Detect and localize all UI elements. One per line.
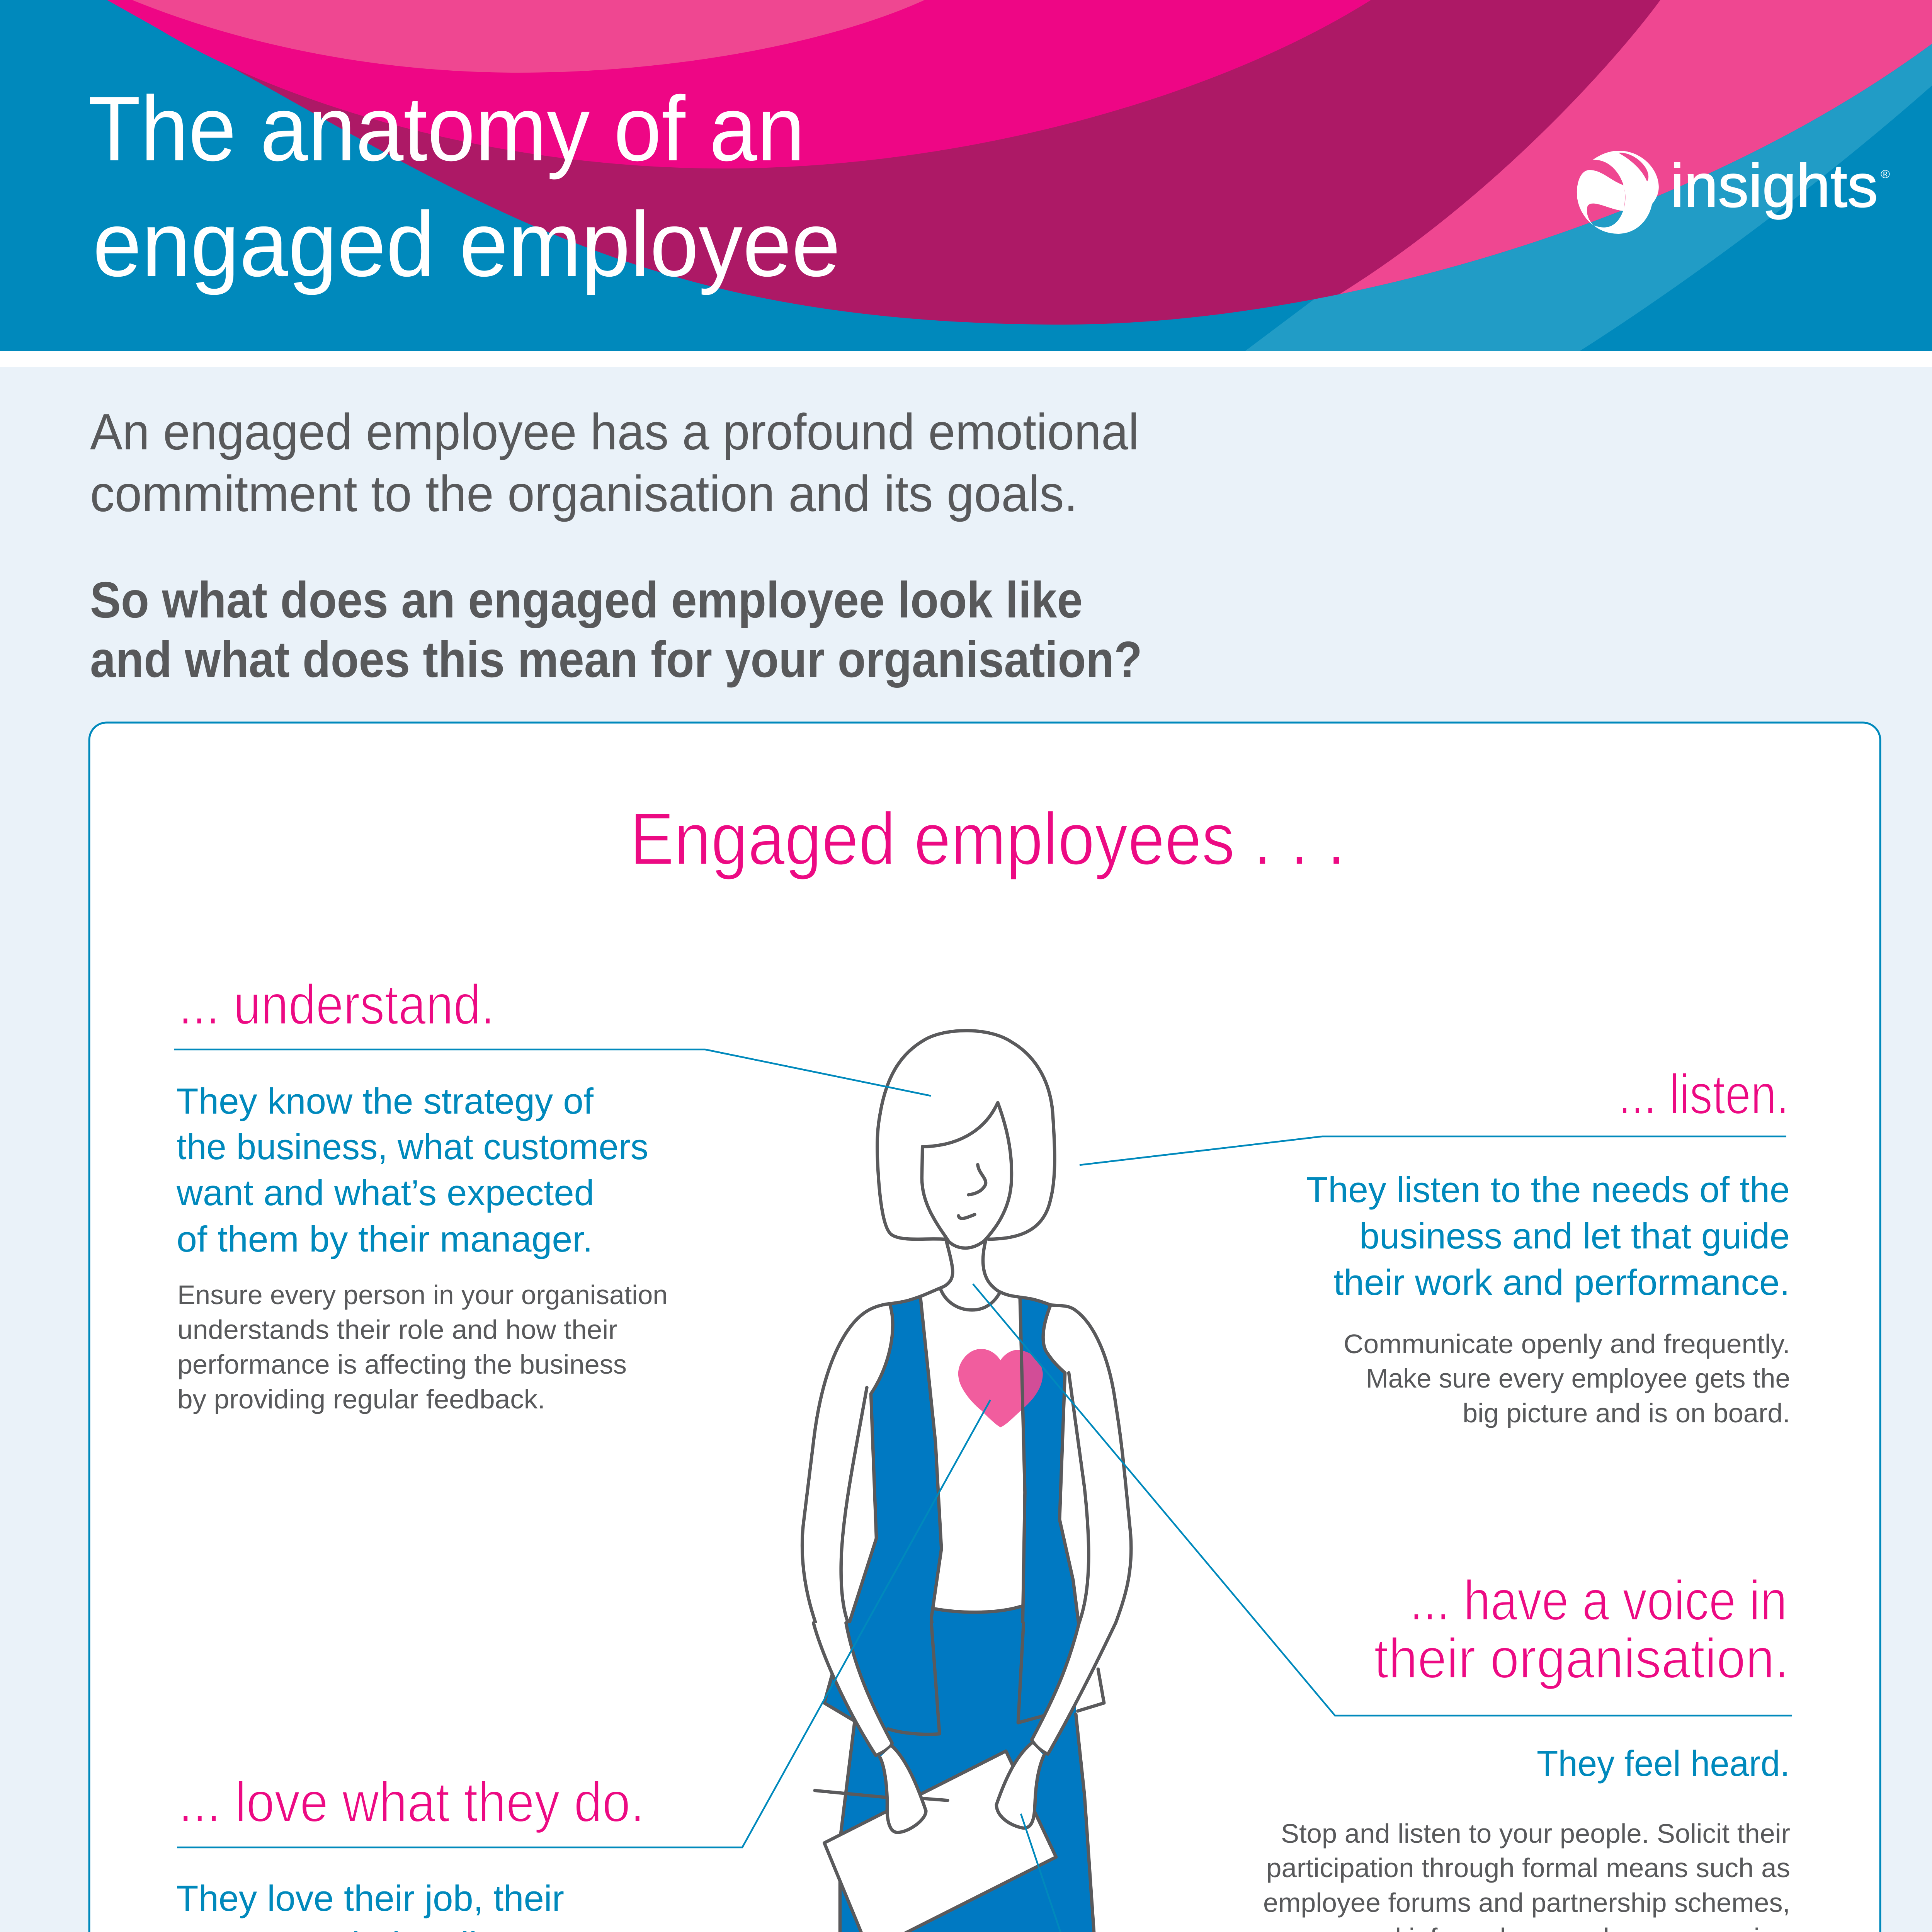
body text: voice: participation through formal means such as <box>1266 1853 1790 1883</box>
head and hair <box>877 1031 1054 1310</box>
intro statement: An engaged employee has a profound emotional <box>90 403 1139 460</box>
body text: voice: employee forums and partnership schemes, <box>1263 1888 1790 1918</box>
logo: insights <box>1577 151 1890 234</box>
body text: understand <box>177 1280 668 1414</box>
blue statement: listen: their work and performance. <box>1333 1262 1790 1303</box>
body text: listen <box>1344 1329 1790 1428</box>
arms <box>813 1623 1116 1755</box>
blue statement: listen: business and let that guide <box>1359 1216 1790 1256</box>
figure upper body <box>802 1031 1131 1626</box>
heading: voice <box>1374 1569 1789 1690</box>
leader line: voice <box>973 1284 1792 1716</box>
body text: voice <box>1263 1818 1790 1932</box>
leader line: hands dirty <box>1021 1814 1788 1932</box>
body text: understand: by providing regular feedback. <box>177 1384 545 1414</box>
intro statement <box>90 403 1139 522</box>
logo: insights: insights <box>1670 152 1878 220</box>
blue statement: voice: They feel heard. <box>1537 1743 1790 1784</box>
paper <box>824 1751 1056 1932</box>
body text: understand: Ensure every person in your organisation <box>177 1280 668 1310</box>
heading: voice: ... have a voice in <box>1410 1569 1787 1632</box>
blue statement: love: They love their job, their <box>176 1878 564 1918</box>
blue statement: understand: They know the strategy of <box>176 1081 594 1121</box>
blue statement: understand <box>176 1081 648 1259</box>
heading: understand: ... understand. <box>179 973 495 1036</box>
panel: engaged employees <box>89 723 1880 1932</box>
torso outlines <box>802 1289 1131 1626</box>
intro statement: commitment to the organisation and its goals. <box>90 465 1078 522</box>
blue statement: understand: want and what’s expected <box>176 1172 594 1213</box>
figure: employee illustration <box>802 1031 1131 1932</box>
leader line: love <box>177 1400 990 1847</box>
leader line: understand <box>174 1049 931 1096</box>
blue statement: understand: the business, what customers <box>177 1126 648 1167</box>
heading: love: ... love what they do. <box>179 1770 645 1833</box>
blue statement: understand: of them by their manager. <box>177 1219 593 1259</box>
blue statement: listen: They listen to the needs of the <box>1306 1169 1790 1210</box>
title: The anatomy of an <box>88 78 805 180</box>
body text: listen: Communicate openly and frequently. <box>1344 1329 1790 1359</box>
body text: understand: performance is affecting the business <box>177 1349 627 1379</box>
title: engaged employee <box>93 193 840 296</box>
blue statement: listen <box>1306 1169 1790 1303</box>
title <box>88 78 840 296</box>
heading: voice: their organisation. <box>1374 1627 1789 1690</box>
heading: engaged employees: Engaged employees . . . <box>630 797 1345 880</box>
block: have a voice <box>1263 1569 1790 1932</box>
body text: understand: understands their role and how their <box>177 1315 617 1345</box>
leader line: listen <box>1080 1136 1786 1165</box>
icon: heart <box>958 1349 1043 1427</box>
intro question <box>90 571 1142 688</box>
blue statement: love <box>176 1878 596 1932</box>
heading: listen: ... listen. <box>1618 1063 1789 1126</box>
block: love what they do <box>176 1770 689 1932</box>
intro question: So what does an engaged employee look like <box>90 571 1083 628</box>
body text: voice: Stop and listen to your people. Solicit their <box>1281 1818 1790 1849</box>
block: listen <box>1306 1063 1790 1428</box>
figure lower body <box>813 1623 1117 1932</box>
hands <box>880 1743 1044 1832</box>
logo: insights: ® <box>1881 168 1890 181</box>
header banner <box>0 0 1932 351</box>
body text: listen: Make sure every employee gets the <box>1366 1363 1790 1393</box>
block: understand <box>176 973 668 1414</box>
body text: listen: big picture and is on board. <box>1463 1398 1790 1428</box>
intro question: and what does this mean for your organisation? <box>90 631 1142 688</box>
icon: insights swirl <box>1577 151 1659 234</box>
